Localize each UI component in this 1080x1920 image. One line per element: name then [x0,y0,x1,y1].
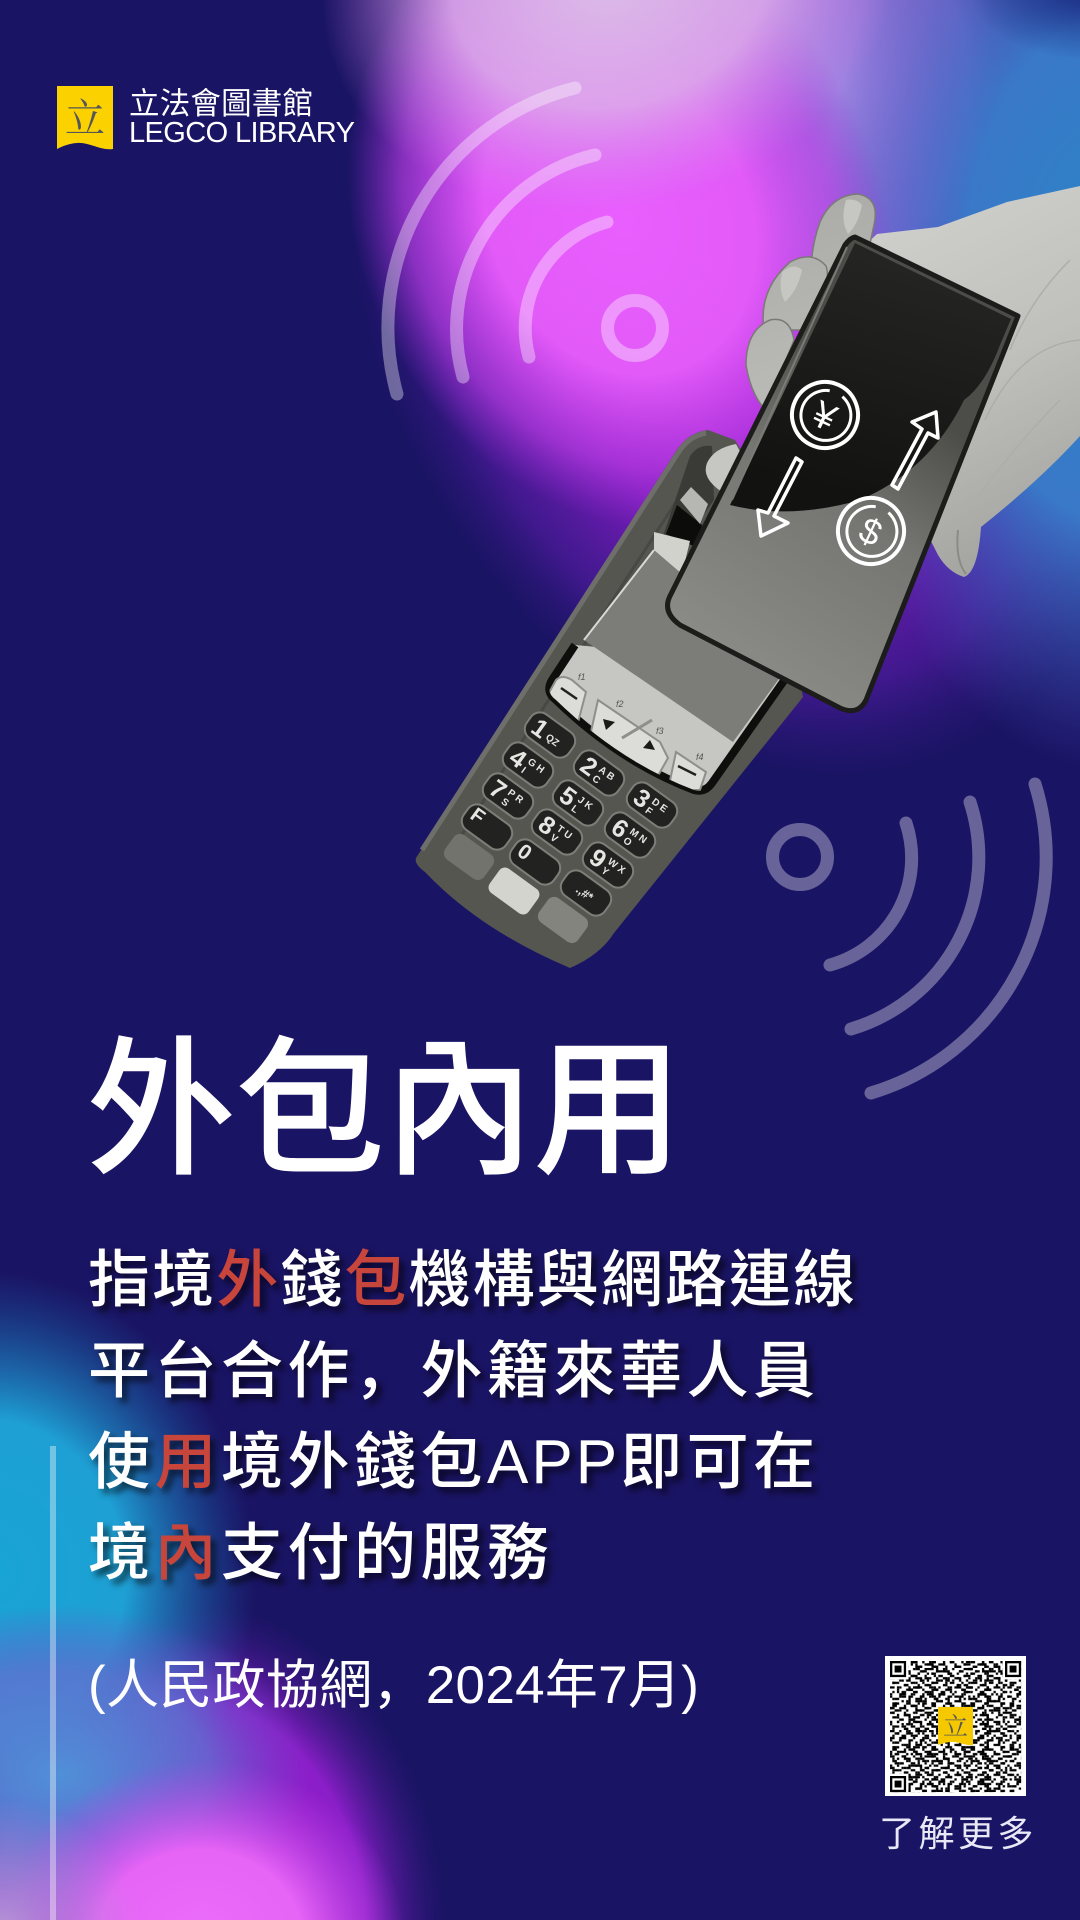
card reader slot [666,505,702,548]
QR caption: 了解更多 [879,1813,1037,1854]
screen: f1 [578,672,586,682]
line 3: 使用境外錢包APP即可在 [88,1428,820,1497]
accent vertical bar [50,1446,56,1920]
terminal [416,430,803,968]
keypad: V [548,832,560,845]
keypad: T U [554,824,574,842]
icon: dollar coin: $ [853,509,889,554]
icon: yuan coin: ¥ [805,393,843,441]
logo: Legco Library [57,86,354,150]
hand [746,186,1080,577]
fingers [746,194,875,406]
icon: yellow flag with emblem [57,86,113,150]
QR centre logo: 立 [943,1713,968,1741]
keypad: 3 [628,783,656,814]
keypad: F [466,804,489,829]
keypad: Y [599,865,611,878]
phone [668,237,1018,711]
title: 外包內用 [86,1026,682,1194]
body text [88,1246,860,1588]
screen [545,532,800,791]
keypad: P R [505,788,526,807]
keypad: L [569,803,580,816]
source citation: (人民政協網，2024年7月) [88,1656,699,1715]
illustration: terminal, hand and phone [416,186,1080,968]
keypad: 4 [504,743,532,774]
keypad: I [519,765,528,776]
keypad: M N [627,827,649,846]
keypad: 8 [533,810,561,841]
logo text english: LEGCO LIBRARY [129,117,354,149]
keypad: 2 [575,751,603,782]
keypad: A B [596,765,616,783]
keypad: 7 [484,774,512,805]
phone dark reflection [730,243,1011,511]
line 1: 指境外錢包機構與網路連線 [88,1246,857,1315]
keypad: W X [605,857,627,877]
QR code [885,1656,1026,1796]
arrow up [892,412,938,489]
screen: f2 [616,699,624,709]
screen: f4 [696,752,704,762]
icon: yellow flag with emblem: 立 [65,96,105,141]
keypad: F [643,805,654,818]
keypad: .,#* [573,882,596,904]
keypad: 9 [584,843,612,874]
keypad: QZ [543,732,561,749]
line 4: 境內支付的服務 [88,1519,554,1588]
keypad: D E [649,797,669,815]
keypad: S [499,796,511,809]
terminal thumb [706,444,750,492]
soft buttons [545,677,706,790]
keypad: 6 [606,813,634,844]
inner rim of terminal top [660,446,714,560]
keypad: O [621,835,634,849]
keypad: 5 [554,781,582,812]
keypad: J K [575,795,595,813]
keypad [441,708,682,946]
arrow down [758,458,802,536]
logo text chinese: 立法會圖書館 [129,87,313,121]
line 2: 平台合作，外籍來華人員 [88,1337,820,1406]
keypad: 1 [526,713,554,744]
keypad: G H [525,757,546,776]
screen: f3 [656,726,664,736]
icon: yuan coin [781,371,869,459]
icon: dollar coin [827,487,915,575]
keypad: 0 [513,840,536,865]
keypad: C [590,773,602,787]
QR centre logo [938,1707,973,1745]
